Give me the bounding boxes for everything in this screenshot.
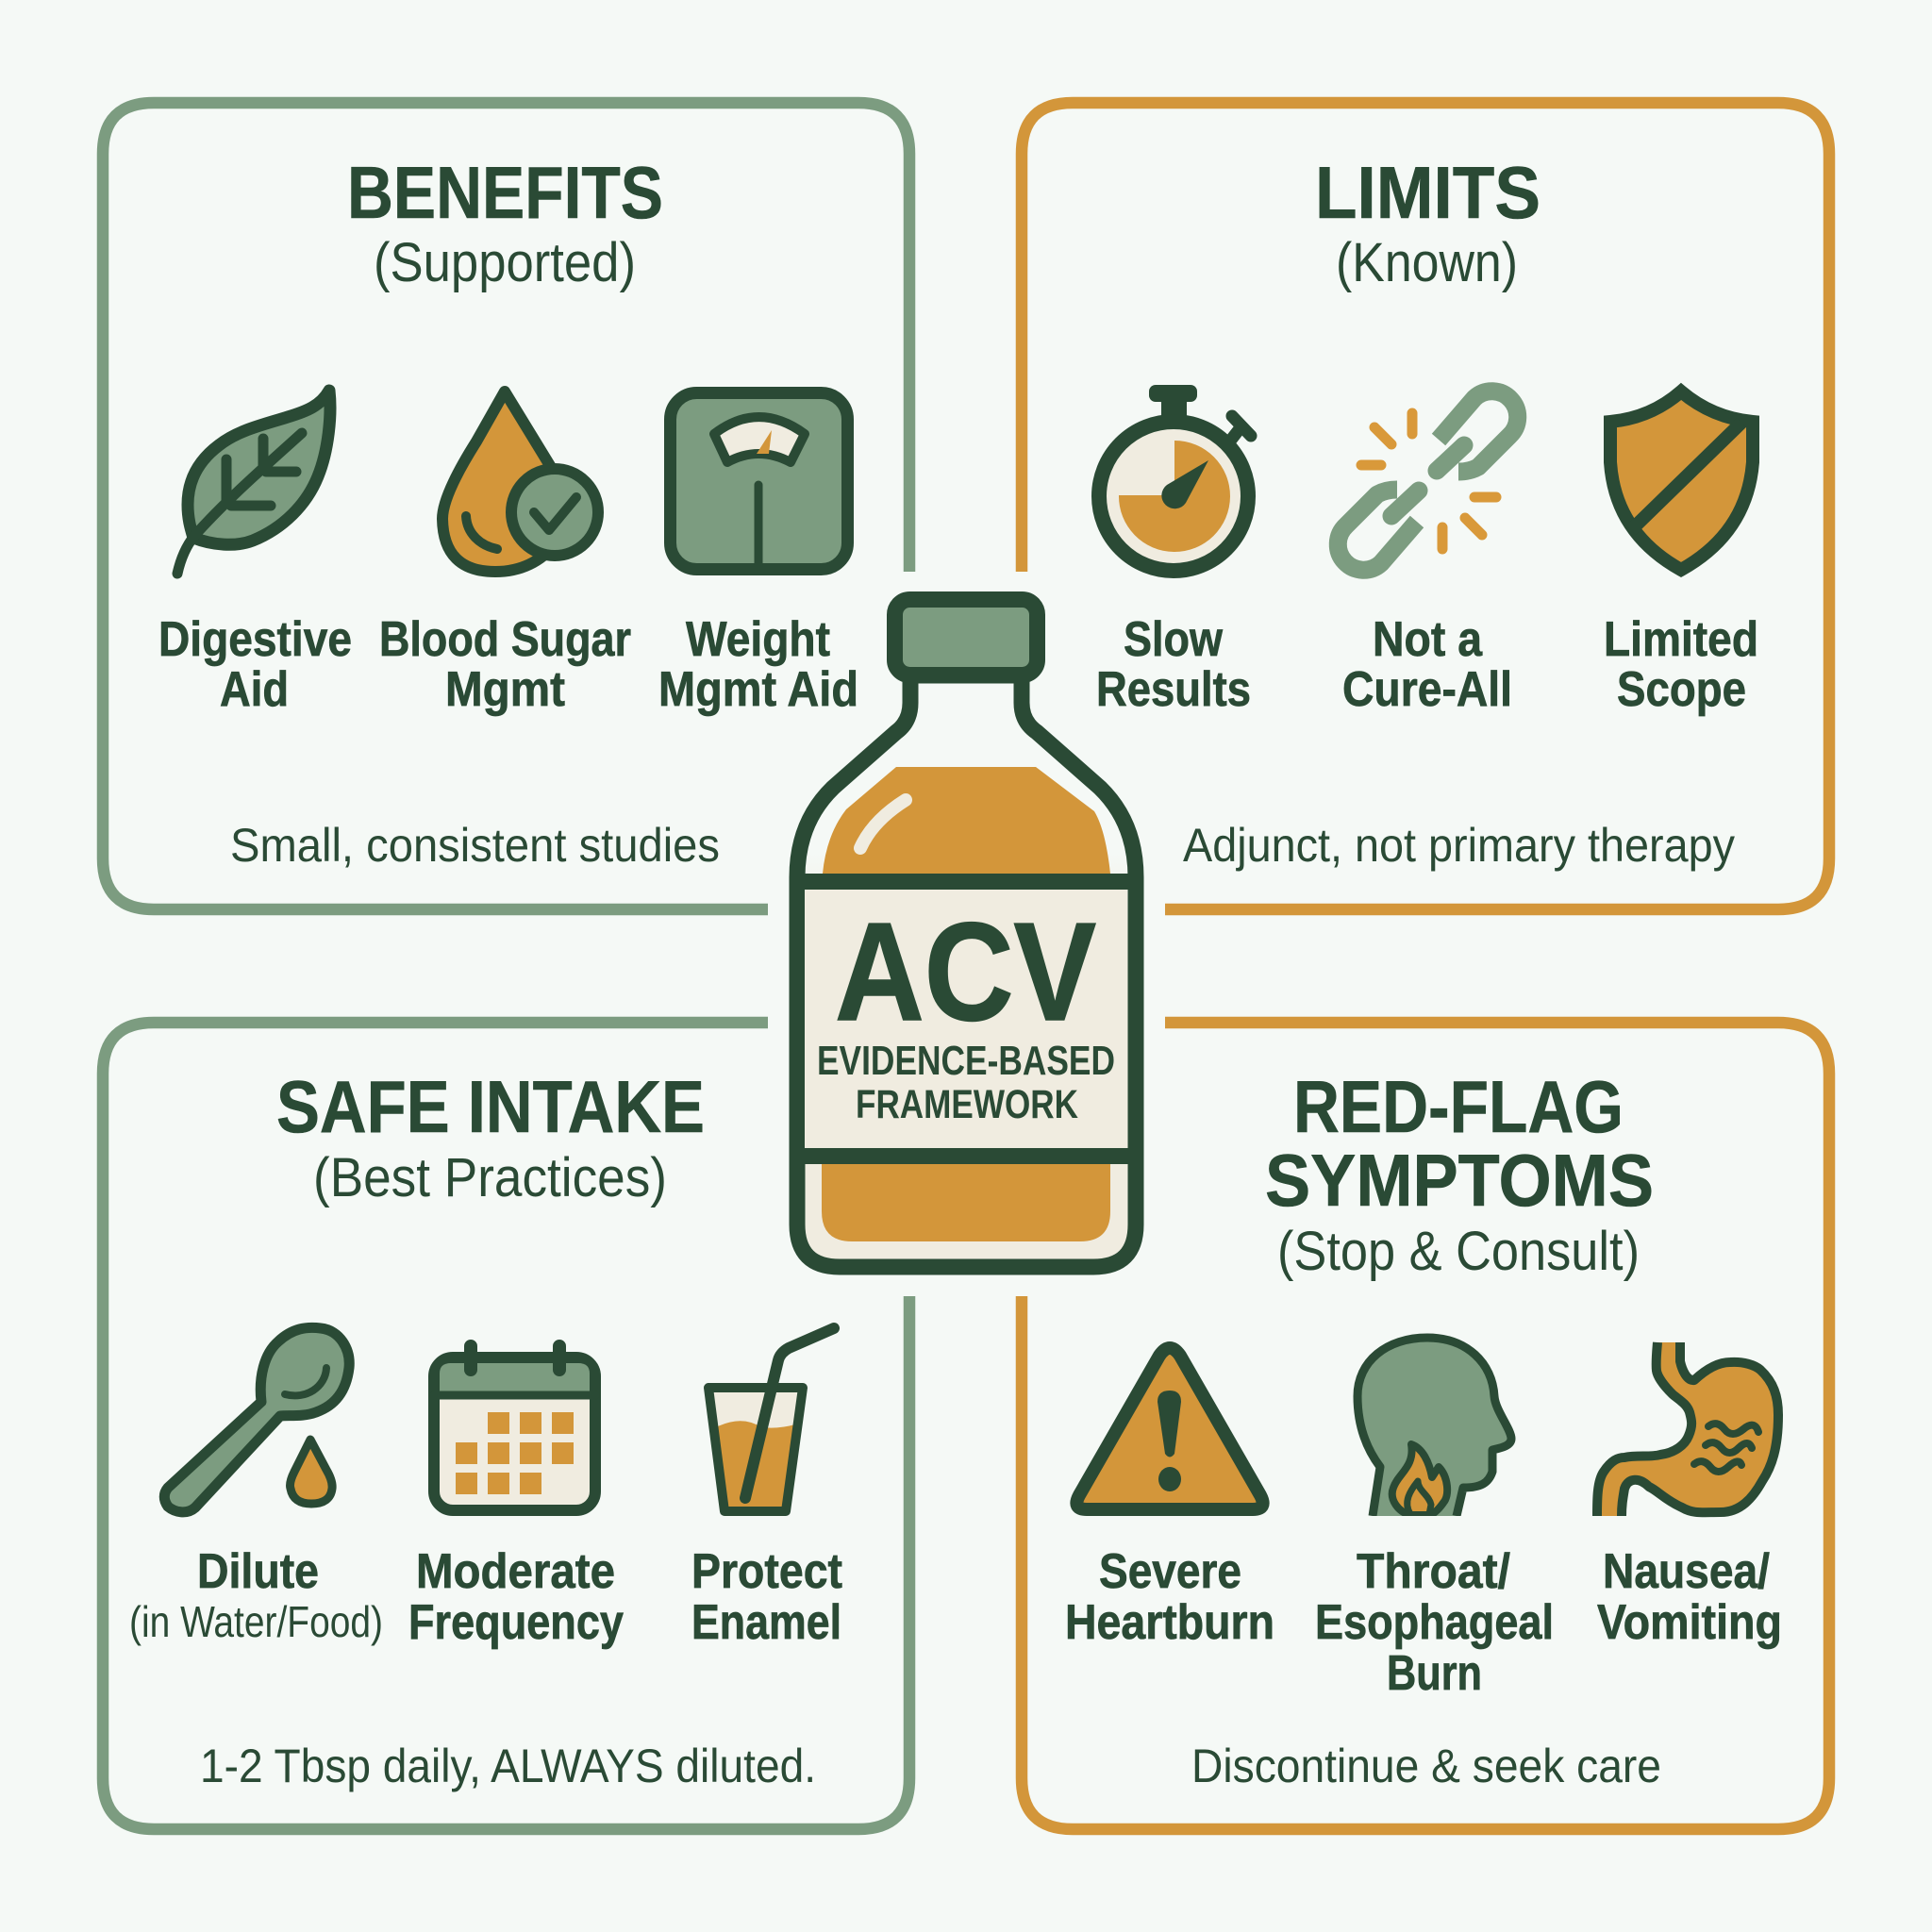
label: protect enamel: Enamel <box>691 1595 841 1650</box>
label: severe heartburn <box>1065 1544 1274 1650</box>
label: slow results <box>1096 612 1251 717</box>
label: limited scope: Limited <box>1604 612 1758 667</box>
label: not a cure-all: Not a <box>1373 612 1483 667</box>
heading: limits: LIMITS <box>1315 151 1541 234</box>
label: severe heartburn: Severe <box>1099 1544 1241 1599</box>
icon: head with throat burn <box>1357 1338 1511 1525</box>
label: moderate frequency: Frequency <box>408 1595 624 1650</box>
label: weight mgmt aid <box>658 612 858 717</box>
central bottle: ACV <box>797 600 1136 1267</box>
label: blood sugar mgmt: Blood Sugar <box>379 612 631 667</box>
label: throat or esophageal burn: Throat/ <box>1357 1544 1510 1599</box>
label: nausea or vomiting <box>1597 1544 1782 1650</box>
heading: red-flag symptoms <box>1265 1065 1654 1222</box>
icon: glass with straw <box>708 1328 834 1511</box>
label: slow results: Slow <box>1124 612 1223 667</box>
heading: safe intake: SAFE INTAKE <box>276 1065 705 1148</box>
icon: weight scale <box>670 392 847 570</box>
label: blood sugar mgmt: Mgmt <box>445 662 565 717</box>
subheading: stop and consult: (Stop & Consult) <box>1277 1221 1640 1282</box>
label: throat or esophageal burn: Esophageal <box>1315 1595 1554 1650</box>
label: protect enamel <box>691 1544 842 1650</box>
label: severe heartburn: Heartburn <box>1065 1595 1274 1650</box>
glass highlight <box>860 800 906 848</box>
label: moderate frequency: Moderate <box>416 1544 615 1599</box>
bottle label <box>805 881 1127 1157</box>
label text: evidence-based framework: FRAMEWORK <box>856 1082 1078 1127</box>
liquid: upper <box>823 767 1110 874</box>
icon: stomach <box>1597 1342 1778 1516</box>
label: not a cure-all: Cure-All <box>1342 662 1512 717</box>
label text: ACV: ACV <box>835 894 1096 1050</box>
icon: calendar <box>434 1346 595 1510</box>
label: dilute in water or food: Dilute <box>197 1544 319 1599</box>
panel: benefits <box>103 103 909 909</box>
icon: leaf <box>177 391 330 574</box>
label: slow results: Results <box>1096 662 1251 717</box>
label: limited scope <box>1604 612 1758 717</box>
heading: benefits: BENEFITS <box>347 151 663 234</box>
heading: red-flag symptoms: SYMPTOMS <box>1265 1139 1654 1222</box>
icon: blood drop with check <box>442 391 598 572</box>
label: nausea or vomiting: Nausea/ <box>1603 1544 1770 1599</box>
subheading: known: (Known) <box>1336 232 1518 293</box>
label: limited scope: Scope <box>1617 662 1746 717</box>
panel: limits <box>1022 103 1829 909</box>
label: blood sugar mgmt <box>379 612 631 717</box>
label: moderate frequency <box>408 1544 624 1650</box>
label: weight mgmt aid: Weight <box>686 612 830 667</box>
footer note: limits: Adjunct, not primary therapy <box>1183 819 1735 872</box>
icon: warning triangle <box>1076 1348 1263 1509</box>
icon: shield <box>1610 391 1753 570</box>
icon: spoon and drop <box>164 1327 349 1512</box>
liquid: lower <box>822 1164 1110 1241</box>
heading: red-flag symptoms: RED-FLAG <box>1293 1065 1624 1148</box>
icon: stopwatch <box>1099 385 1251 571</box>
subheading: best practices: (Best Practices) <box>313 1147 667 1208</box>
footer note: red flags: Discontinue & seek care <box>1191 1740 1661 1792</box>
label: not a cure-all <box>1342 612 1512 717</box>
panel: safe intake <box>103 1023 909 1829</box>
bottle cap <box>894 600 1038 675</box>
label: digestive aid <box>158 612 352 717</box>
bottle body <box>797 675 1136 1267</box>
label: throat or esophageal burn <box>1315 1544 1554 1701</box>
label: digestive aid: Digestive <box>158 612 352 667</box>
label text: evidence-based framework <box>817 1038 1115 1127</box>
panel: red-flag symptoms <box>1022 1023 1829 1829</box>
footer note: benefits: Small, consistent studies <box>230 819 720 872</box>
label: dilute in water or food: (in Water/Food) <box>129 1597 383 1646</box>
label: digestive aid: Aid <box>220 662 289 717</box>
footer note: safe intake: 1-2 Tbsp daily, ALWAYS diluted. <box>200 1740 816 1792</box>
icon: broken chain <box>1338 391 1518 570</box>
label: throat or esophageal burn: Burn <box>1387 1646 1482 1701</box>
subheading: supported: (Supported) <box>374 232 636 293</box>
label: dilute in water or food <box>129 1544 383 1646</box>
label text: evidence-based framework: EVIDENCE-BASED <box>817 1038 1115 1084</box>
label: weight mgmt aid: Mgmt Aid <box>658 662 858 717</box>
label: protect enamel: Protect <box>691 1544 842 1599</box>
label: nausea or vomiting: Vomiting <box>1597 1595 1782 1650</box>
